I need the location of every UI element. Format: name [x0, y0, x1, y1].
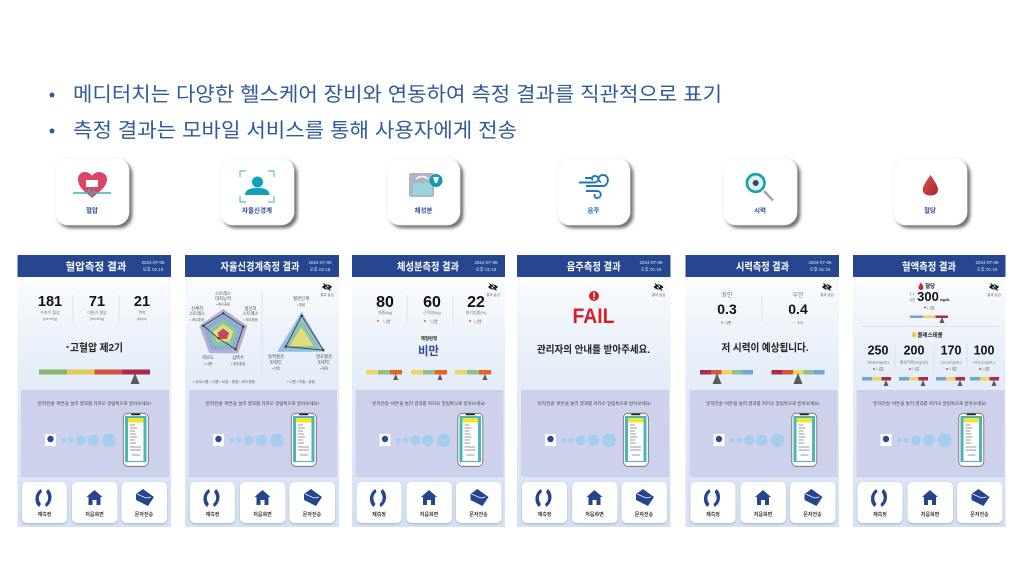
pentagon radar chart: 신체적 — [191, 305, 203, 312]
blood sugar reading: ↑↑ — [909, 292, 915, 298]
pentagon radar chart: • 매우좋음 — [231, 361, 245, 366]
triangle radar chart — [268, 295, 332, 384]
vision readings: 좌안 — [721, 291, 733, 299]
triangle radar chart: 탄성도 — [318, 358, 330, 364]
header bar — [853, 255, 1006, 277]
panel: 혈압측정 결과 — [18, 255, 171, 527]
vision readings — [717, 291, 808, 325]
vision readings: 주의 — [797, 320, 803, 325]
message and buttons: 재측정 — [38, 511, 52, 518]
icon card: 음주: 음주 — [588, 206, 599, 214]
icon card: 음주 — [557, 158, 630, 225]
gauge bars — [366, 370, 491, 380]
hide result icon: 결과 숨김 — [987, 292, 1001, 297]
body composition readings: 체지방률(%) — [466, 309, 487, 315]
body composition readings: 22 — [467, 294, 485, 311]
pentagon radar chart: • 매우좋음 — [243, 317, 258, 322]
guidance text: 관리자의 안내를 받아주세요. — [537, 343, 650, 356]
pentagon radar chart — [189, 290, 258, 384]
header bar: 오후 01:15 — [977, 267, 998, 273]
header bar: 체성분측정 결과 — [397, 260, 459, 273]
header bar — [686, 255, 839, 277]
triangle radar chart: 말초혈관 — [316, 353, 332, 360]
vision readings: 0.3 — [717, 301, 737, 317]
blood pressure readings: 71 — [89, 294, 105, 310]
header bar — [185, 255, 339, 277]
icon card: 자율신경계 — [220, 158, 294, 225]
message and buttons — [205, 400, 322, 518]
message and buttons: 재측정 — [873, 511, 887, 518]
message and buttons: 처음화면 — [754, 511, 773, 518]
message and buttons — [873, 400, 989, 518]
body composition readings — [376, 294, 487, 324]
blood pressure readings: 21 — [134, 294, 150, 310]
blood pressure readings: 이완기 혈압 — [87, 309, 107, 315]
message and buttons: 문자전송 — [970, 511, 989, 518]
message and buttons: 처음화면 — [921, 511, 940, 518]
pentagon radar chart: 심박수 — [232, 354, 244, 361]
header bar: 혈액측정 결과 — [902, 260, 956, 273]
hide result icon: 결과 숨김 — [486, 292, 500, 297]
message and buttons — [537, 400, 654, 518]
header bar: 자율신경계측정 결과 — [220, 260, 300, 273]
pentagon radar chart: 스트레스 — [215, 290, 231, 297]
message and buttons: 처음화면 — [85, 511, 104, 518]
hide result icon — [652, 284, 665, 297]
header bar: 오후 01:15 — [810, 267, 831, 273]
gauge bars — [700, 370, 824, 384]
gauge bar — [39, 370, 150, 384]
hide result icon — [820, 284, 834, 297]
vision readings: 나쁨 — [725, 320, 731, 325]
body composition readings: 80 — [376, 294, 394, 311]
panel: 시력측정 결과 — [686, 255, 839, 527]
header bar — [517, 255, 670, 277]
message and buttons: 재측정 — [372, 511, 386, 518]
triangle radar chart: • 좋음 — [297, 303, 305, 307]
cholesterol readings: 250 — [868, 344, 888, 358]
hide result icon — [320, 284, 334, 297]
heading bullets: 측정 결과는 모바일 서비스를 통해 사용자에게 전송 — [73, 119, 517, 142]
header bar: 오후 01:15 — [143, 267, 164, 273]
blood sugar reading: 나쁨 — [927, 304, 935, 310]
blood pressure readings: 181 — [38, 294, 62, 310]
blood pressure readings — [38, 294, 150, 322]
header bar: 오후 01:15 — [310, 267, 331, 273]
panel: 자율신경계측정 결과 — [185, 255, 339, 527]
blood sugar reading: 식전 — [909, 297, 915, 302]
triangle radar chart: 탄성도 — [270, 358, 282, 364]
panel: 체성분측정 결과 — [352, 255, 505, 527]
cholesterol readings: HDL(mg/dL) — [973, 360, 996, 364]
triangle radar chart: • 보통 — [272, 366, 280, 370]
cholesterol readings: 나쁨 — [982, 366, 990, 372]
vision readings: 우안 — [792, 291, 804, 299]
blood pressure readings: (mmHg) — [43, 316, 58, 321]
icon card: 자율신경계: 자율신경계 — [242, 206, 272, 214]
header bar: 오후 01:15 — [641, 267, 662, 273]
cholesterol heading: 콜레스테롤 — [917, 331, 943, 339]
body composition readings: 나쁨 — [383, 318, 391, 324]
header bar: 2024-07-05 — [808, 260, 832, 265]
header bar — [352, 255, 505, 277]
cholesterol readings: 나쁨 — [876, 366, 884, 372]
header bar: 2024-07-05 — [308, 260, 332, 265]
message and buttons: 문자전송 — [803, 511, 822, 518]
body composition readings: 근육량(kg) — [423, 309, 442, 315]
message and buttons: 문자전송 — [469, 511, 488, 518]
message and buttons: '문자전송' 버튼을 눌러 결과를 카카오 알림톡으로 받아보세요! — [372, 400, 485, 407]
pentagon radar chart: • 매우나쁨 • 나쁨 • 보통 • 좋음 • 매우좋음 — [193, 379, 255, 384]
cholesterol readings: 중성지방(mg/dL) — [900, 358, 929, 364]
icon card: 혈압 — [55, 158, 129, 225]
message and buttons: '문자전송' 버튼을 눌러 결과를 카카오 알림톡으로 받아보세요! — [873, 400, 986, 407]
message and buttons — [706, 400, 822, 518]
FAIL text: FAIL — [572, 305, 615, 328]
blood sugar reading: 300 — [917, 289, 939, 304]
hide result icon: 결과 숨김 — [652, 292, 665, 297]
panel: 혈액측정 결과 — [853, 255, 1006, 527]
message and buttons: 처음화면 — [253, 511, 272, 518]
cholesterol readings: 100 — [974, 344, 994, 358]
message and buttons: 문자전송 — [135, 511, 154, 518]
result text: 고혈압 제2기 — [70, 341, 123, 354]
header bar: 혈압측정 결과 — [66, 260, 127, 273]
body composition readings: 60 — [423, 294, 441, 311]
pentagon radar chart: 정신적 — [245, 305, 256, 312]
hide result icon — [486, 284, 500, 297]
hide result icon: 결과 숨김 — [820, 292, 834, 297]
cholesterol readings: 170 — [941, 344, 961, 358]
cholesterol heading — [912, 331, 943, 339]
icon card: 혈당: 혈당 — [924, 206, 936, 214]
blood pressure readings: (bpm) — [137, 316, 148, 321]
message and buttons: '문자전송' 버튼을 눌러 결과를 카카오 알림톡으로 받아보세요! — [706, 400, 819, 407]
panel: 음주측정 결과 — [517, 255, 670, 527]
message and buttons: 문자전송 — [635, 511, 654, 518]
blood pressure readings: 수축기 혈압 — [40, 309, 60, 315]
cholesterol readings: 나쁨 — [949, 366, 957, 372]
blood sugar reading — [909, 282, 951, 323]
vision readings: 0.4 — [788, 301, 808, 317]
message and buttons: '문자전송' 버튼을 눌러 결과를 카카오 알림톡으로 받아보세요! — [537, 400, 651, 407]
icon card: 시력 — [723, 158, 797, 225]
pentagon radar chart: 스트레스 — [189, 310, 205, 317]
message and buttons: 문자전송 — [303, 511, 322, 518]
header bar — [18, 255, 171, 277]
message and buttons: 재측정 — [706, 511, 720, 518]
header bar: 2024-07-05 — [474, 260, 498, 265]
pentagon radar chart: • 매우좋음 — [216, 302, 230, 306]
triangle radar chart: 혈관단계 — [293, 295, 309, 302]
blood sugar reading: mg/dL — [940, 298, 951, 302]
result text: 저 시력이 예상됩니다. — [722, 341, 809, 354]
hide result icon — [987, 284, 1001, 297]
message and buttons: 재측정 — [206, 511, 220, 518]
blood pressure readings: (mmHg) — [90, 316, 105, 321]
message and buttons: 처음화면 — [420, 511, 439, 518]
message and buttons: '문자전송' 버튼을 눌러 결과를 카카오 알림톡으로 받아보세요! — [205, 400, 319, 407]
triangle radar chart: • 나쁨 • 보통 • 좋음 — [287, 379, 315, 384]
cholesterol readings: 나쁨 — [912, 366, 920, 372]
cholesterol readings: Total(mg/dL) — [867, 360, 890, 364]
icon card: 시력: 시력 — [754, 206, 766, 214]
header bar: 2024-07-05 — [639, 260, 663, 265]
blood pressure readings: 맥박 — [138, 309, 146, 315]
body composition readings: 나쁨 — [474, 318, 482, 324]
body type result: 체형판정 — [421, 335, 437, 342]
heading bullets — [50, 83, 722, 142]
pentagon radar chart: • 나쁨 — [204, 361, 212, 366]
triangle radar chart: • 좋음 — [320, 366, 328, 370]
body type result — [418, 335, 439, 358]
icon card: 체성분 — [387, 158, 460, 225]
pentagon radar chart: 대처능력 — [215, 295, 231, 302]
header bar: 오후 01:15 — [476, 267, 497, 273]
body composition readings: 체중(kg) — [378, 309, 393, 315]
message and buttons — [372, 400, 488, 518]
icon card: 혈당 — [893, 158, 967, 225]
header bar: 시력측정 결과 — [736, 260, 789, 273]
body type result: 비만 — [418, 344, 439, 358]
icon card: 체성분: 체성분 — [415, 206, 432, 214]
alert icon — [589, 291, 599, 301]
message and buttons — [37, 400, 154, 518]
message and buttons: 재측정 — [538, 511, 552, 518]
header bar: 2024-07-05 — [141, 260, 165, 265]
icon card: 혈압: 혈압 — [86, 206, 98, 214]
cholesterol readings — [867, 344, 996, 372]
hide result icon: 결과 숨김 — [320, 292, 334, 297]
message and buttons: 처음화면 — [585, 511, 604, 518]
pentagon radar chart: • 매우좋음 — [190, 317, 204, 322]
triangle radar chart: 동맥혈관 — [268, 353, 284, 360]
body composition readings: 나쁨 — [430, 318, 438, 324]
cholesterol readings: LDL(mg/dL) — [940, 360, 962, 364]
cholesterol gauge bars — [862, 377, 999, 386]
pentagon radar chart: 피로도 — [202, 354, 214, 361]
cholesterol readings: 200 — [904, 344, 924, 358]
pentagon radar chart: 스트레스 — [243, 310, 258, 317]
header bar: 음주측정 결과 — [567, 260, 621, 273]
blood sugar reading: 혈당 — [925, 282, 935, 290]
heading bullets: 메디터치는 다양한 헬스케어 장비와 연동하여 측정 결과를 직관적으로 표기 — [73, 83, 722, 106]
message and buttons: '문자전송' 버튼을 눌러 결과를 카카오 알림톡으로 받아보세요! — [37, 400, 151, 407]
header bar: 2024-07-05 — [975, 260, 999, 265]
